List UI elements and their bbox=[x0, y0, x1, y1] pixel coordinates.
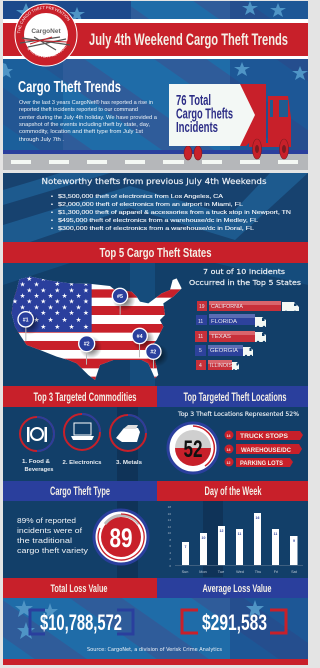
map: USA flag: ★ bbox=[34, 281, 40, 289]
commodity labels: 3. Metals bbox=[116, 460, 142, 466]
callout: 76 total thefts: Cargo Thefts bbox=[176, 106, 233, 122]
chart: day of the week: 2 bbox=[169, 557, 171, 561]
map: USA flag: ★ bbox=[40, 298, 46, 306]
text: 89 percent: incidents were of bbox=[17, 526, 83, 535]
commodity labels: Beverages bbox=[24, 467, 54, 473]
header: top 5 states: Top 5 Cargo Theft States bbox=[100, 245, 212, 260]
map: USA flag: ★ bbox=[34, 303, 40, 311]
section backgrounds bbox=[3, 263, 308, 579]
map: USA flag: ★ bbox=[76, 292, 82, 300]
map: USA flag: ★ bbox=[48, 316, 54, 324]
list of thefts bbox=[51, 194, 291, 232]
gauge: 52 bbox=[168, 423, 218, 473]
header: top 5 states bbox=[3, 242, 308, 263]
text: 7 out of 10: Occurred in the Top 5 States bbox=[189, 279, 301, 287]
intro text: commodity, location and theft type from July 1st bbox=[19, 129, 144, 135]
bar: Georgia bbox=[195, 345, 253, 357]
location labels bbox=[224, 430, 303, 467]
header: total loss: Total Loss Value bbox=[50, 583, 108, 595]
list of thefts: • bbox=[51, 202, 53, 208]
commodity labels bbox=[22, 459, 142, 473]
header: average loss: Average Loss Value bbox=[202, 583, 272, 595]
label: truck stops: TRUCK STOPS bbox=[240, 434, 288, 440]
stat: average loss value: $291,583 bbox=[202, 610, 267, 635]
heading: noteworthy: Noteworthy thefts from previous July 4th Weekends bbox=[42, 177, 267, 186]
gauge: 52: 52 bbox=[184, 436, 202, 463]
text: top 3 locations: Top 3 Theft Locations Represented 52% bbox=[177, 411, 299, 418]
chart: day of the week: 0 bbox=[169, 564, 171, 568]
chart: day of the week: 11 bbox=[238, 532, 241, 536]
intro text: reported theft incidents reported to our command bbox=[19, 107, 138, 113]
chart: day of the week: 9 bbox=[293, 539, 295, 543]
header: commodities: Top 3 Targeted Commodities bbox=[34, 392, 136, 404]
bar: Florida: FLORIDA bbox=[211, 319, 238, 325]
map: USA flag: ★ bbox=[83, 286, 89, 294]
hero background bbox=[3, 1, 308, 151]
map: USA flag: ★ bbox=[83, 298, 89, 306]
bar: California bbox=[197, 301, 299, 313]
map: USA flag: ★ bbox=[20, 292, 26, 300]
map: USA flag: ★ bbox=[34, 316, 40, 324]
list of thefts: $300,000 theft of electronics from a warehouse/dc in Doral, FL bbox=[58, 226, 254, 232]
header: theft type bbox=[3, 481, 157, 501]
list of thefts: • bbox=[51, 218, 53, 224]
source: Source: CargoNet, a division of Verisk Crime Analytics bbox=[87, 647, 222, 653]
intro text: center during the July 4th holiday. We have provided a bbox=[19, 115, 157, 121]
bar: Texas: 11 bbox=[198, 334, 203, 340]
list of thefts: $3,500,000 theft of electronics from Los Angeles, CA bbox=[58, 194, 223, 200]
text: 7 out of 10: 7 out of 10 Incidents bbox=[203, 268, 285, 276]
label: warehouse: WAREHOUSE/DC bbox=[241, 448, 292, 454]
map: USA flag: ★ bbox=[34, 292, 40, 300]
header: commodities bbox=[3, 386, 157, 407]
map: USA flag: ★ bbox=[69, 323, 75, 331]
chart: day of the week: 4 bbox=[169, 551, 171, 555]
chart: day of the week: Sun bbox=[182, 570, 188, 574]
map: USA flag: ★ bbox=[54, 298, 60, 306]
bar: Illinois: 4 bbox=[199, 363, 202, 369]
map: USA flag: ★ bbox=[26, 286, 32, 294]
text: 89 percent: the traditional bbox=[17, 536, 72, 545]
map: USA flag: ★ bbox=[26, 298, 32, 306]
map: USA flag: ★ bbox=[62, 303, 68, 311]
header: average loss bbox=[157, 578, 308, 598]
text: 89 percent: 89% of reported bbox=[17, 516, 76, 525]
label: parking lots: PARKING LOTS bbox=[240, 461, 283, 467]
chart: day of the week: Fri bbox=[274, 570, 278, 574]
label: warehouse: 14 bbox=[226, 448, 230, 452]
map: USA flag: ★ bbox=[76, 303, 82, 311]
map pins: #2 bbox=[150, 350, 156, 356]
chart: day of the week: 16 bbox=[168, 512, 171, 516]
chart: day of the week: 12 bbox=[220, 529, 223, 533]
bar: Florida bbox=[196, 314, 266, 328]
map: USA flag: ★ bbox=[69, 298, 75, 306]
truck illustration bbox=[169, 84, 291, 160]
map: USA flag: ★ bbox=[62, 316, 68, 324]
intro text bbox=[19, 99, 157, 143]
chart: day of the week: 11 bbox=[274, 532, 277, 536]
map: USA flag: ★ bbox=[40, 275, 46, 283]
map: USA flag: ★ bbox=[54, 280, 60, 288]
gauge: 89 bbox=[94, 510, 148, 564]
label: truck stops: 14 bbox=[226, 434, 230, 438]
chart: day of the week: Mon bbox=[199, 570, 207, 574]
commodity labels: 1. Food & bbox=[22, 459, 50, 465]
icon: laptop bbox=[64, 414, 100, 450]
logo: CargoNet badge: CargoNet bbox=[31, 28, 61, 35]
gauge: 89: 89 bbox=[110, 523, 132, 553]
label: truck stops bbox=[224, 430, 303, 440]
chart: day of the week: 8 bbox=[169, 538, 171, 542]
road bbox=[3, 150, 308, 170]
footer background bbox=[3, 598, 308, 659]
map: USA flag: ★ bbox=[12, 298, 18, 306]
stat: total loss value: $10,788,572 bbox=[40, 610, 122, 635]
logo: CargoNet badge: THE CARGO THEFT PREVENTION bbox=[17, 6, 70, 34]
intro text: snapshot of the events including theft by state, day, bbox=[19, 122, 150, 128]
text: 89 percent bbox=[17, 516, 88, 555]
chart: day of the week: 10 bbox=[168, 531, 171, 535]
chart: top 5 states bars bbox=[195, 301, 299, 371]
map: USA flag: ★ bbox=[62, 292, 68, 300]
map: USA flag: ★ bbox=[83, 323, 89, 331]
chart: day of the week: 7 bbox=[185, 545, 187, 549]
bar: Texas bbox=[195, 331, 266, 343]
map: USA flag: ★ bbox=[48, 292, 54, 300]
label: parking lots bbox=[224, 458, 293, 467]
list of thefts: • bbox=[51, 194, 53, 200]
chart: day of the week: Wed bbox=[236, 570, 244, 574]
callout: 76 total thefts: Incidents bbox=[176, 120, 218, 136]
list of thefts: $495,000 theft of electronics from a warehouse/dc in Medley, FL bbox=[58, 218, 258, 224]
map: USA flag: ★ bbox=[83, 280, 89, 288]
truck cab bbox=[249, 96, 291, 147]
map: USA flag: ★ bbox=[20, 281, 26, 289]
commodity labels: 2. Electronics bbox=[62, 460, 102, 466]
text: 89 percent: cargo theft variety bbox=[17, 546, 88, 555]
map: USA flag: ★ bbox=[54, 309, 60, 317]
bar: Texas: TEXAS bbox=[211, 334, 232, 340]
bar: Illinois: ILLINOIS bbox=[210, 363, 233, 369]
chart: day of the week: 10 bbox=[202, 536, 205, 540]
list of thefts: $1,300,000 theft of apparel & accessories from a truck stop in Newport, TN bbox=[58, 210, 291, 216]
bar: Illinois bbox=[196, 360, 239, 371]
list of thefts: $2,000,000 theft of electronics from an airport in Miami, FL bbox=[58, 202, 243, 208]
chart: day of the week: 12 bbox=[168, 525, 171, 529]
bar: Georgia: 5 bbox=[199, 348, 202, 354]
chart: day of the week bbox=[168, 505, 303, 574]
chart: day of the week: 14 bbox=[168, 518, 171, 522]
chart: day of the week: Thu bbox=[255, 570, 261, 574]
header: day of the week: Day of the Week bbox=[204, 486, 262, 498]
bar: California: 19 bbox=[199, 304, 205, 310]
chart: day of the week: Tue bbox=[218, 570, 224, 574]
map: USA flag: ★ bbox=[54, 286, 60, 294]
logo: CargoNet badge: & RECOVERY NETWORK bbox=[28, 45, 67, 58]
header: locations bbox=[157, 386, 308, 407]
map: USA flag: ★ bbox=[20, 303, 26, 311]
icon: metals bbox=[110, 415, 146, 451]
callout: 76 total thefts: 76 Total bbox=[176, 93, 211, 109]
map: USA flag: ★ bbox=[69, 280, 75, 288]
map: USA flag bbox=[12, 276, 182, 380]
map pins: #4 bbox=[137, 334, 143, 340]
chart: day of the week: 16 bbox=[256, 516, 259, 520]
chart: day of the week: 18 bbox=[168, 505, 171, 509]
bar: California: CALIFORNIA bbox=[211, 304, 244, 310]
map pins bbox=[18, 288, 169, 369]
logo: CargoNet badge bbox=[14, 4, 78, 66]
icon: food bbox=[20, 417, 54, 451]
map pins: #5 bbox=[117, 294, 123, 300]
list of thefts: • bbox=[51, 210, 53, 216]
intro text: Over the last 3 years CargoNet® has reported a rise in bbox=[19, 99, 153, 106]
footer bar bbox=[3, 659, 308, 665]
label: parking lots: 12 bbox=[226, 461, 230, 465]
map: USA flag: ★ bbox=[40, 286, 46, 294]
map: USA flag: ★ bbox=[54, 323, 60, 331]
map: USA flag: ★ bbox=[20, 316, 26, 324]
map pins: #2 bbox=[84, 342, 90, 348]
list of thefts: • bbox=[51, 226, 53, 232]
header: theft type: Cargo Theft Type bbox=[50, 486, 110, 498]
bar: Florida: 11 bbox=[198, 319, 203, 325]
title banner bbox=[3, 19, 308, 59]
map: USA flag: ★ bbox=[40, 323, 46, 331]
intro text: through July 7th . bbox=[19, 137, 64, 143]
bar: Georgia: GEORGIA bbox=[210, 348, 239, 354]
callout: 76 total thefts bbox=[169, 84, 255, 146]
map: USA flag: ★ bbox=[48, 303, 54, 311]
map: USA flag: ★ bbox=[40, 309, 46, 317]
map: USA flag: ★ bbox=[26, 275, 32, 283]
map: USA flag: ★ bbox=[76, 316, 82, 324]
chart: day of the week: Sat bbox=[291, 570, 298, 574]
chart: day of the week: 6 bbox=[169, 544, 171, 548]
map: USA flag: ★ bbox=[26, 309, 32, 317]
header: day of the week bbox=[157, 481, 308, 501]
map: USA flag: ★ bbox=[69, 286, 75, 294]
panel: noteworthy thefts bbox=[3, 173, 308, 242]
heading: Cargo Theft Trends: Cargo Theft Trends bbox=[18, 79, 121, 96]
map: USA flag: ★ bbox=[83, 309, 89, 317]
map pins: #1 bbox=[23, 317, 29, 323]
header: total loss bbox=[3, 578, 157, 598]
map: USA flag: ★ bbox=[69, 309, 75, 317]
label: warehouse bbox=[224, 444, 302, 454]
